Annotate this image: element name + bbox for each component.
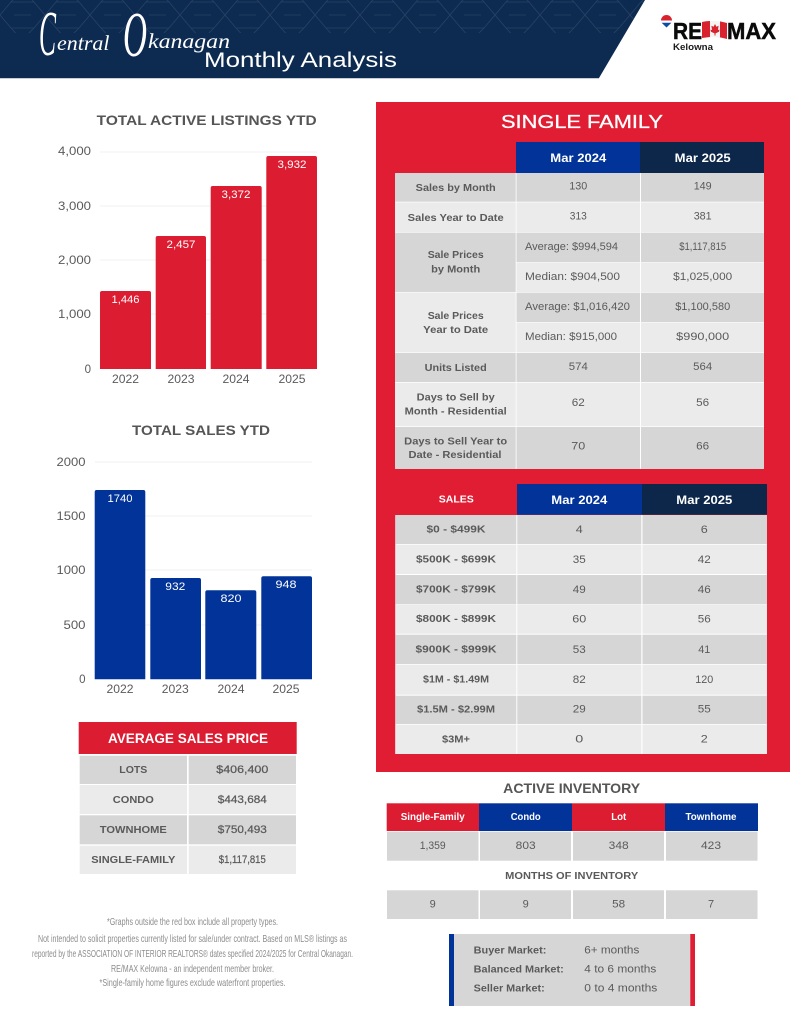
heading: ACTIVE INVENTORY <box>503 781 640 796</box>
row: $800K - $899K: 56 <box>698 614 711 626</box>
row: units listed: Units Listed <box>425 362 487 374</box>
column header 2024: Mar 2024 <box>550 151 607 165</box>
column header 2024 <box>517 484 642 515</box>
row: single-family: SINGLE-FAMILY <box>91 854 175 866</box>
market legend: 4 to 6 months <box>584 963 657 975</box>
row: days to sell by month: Month - Residential <box>405 406 507 418</box>
row: $700K - $799K: 49 <box>573 584 586 596</box>
icon: balloon <box>661 15 672 28</box>
row: $1M - $1.49M <box>395 665 767 695</box>
row: $900K - $999K: 53 <box>573 644 586 656</box>
row: $1.5M - $2.99M: 55 <box>698 704 711 716</box>
row: $3M+ <box>395 725 767 754</box>
footnote text block: *Graphs outside the red box include all property types. <box>107 916 278 928</box>
bar values: 3,932 <box>278 159 306 171</box>
inventory values row: 348 <box>609 840 629 852</box>
y axis labels: 0 <box>85 364 91 376</box>
footnote text block: Not intended to solicit properties currently listed for sale/under contract. Based on MLS® listings as <box>38 933 347 945</box>
inventory header row: Townhome <box>686 812 737 823</box>
y axis labels <box>58 146 91 376</box>
x axis labels: 2022 <box>112 374 139 386</box>
row: townhome <box>80 815 296 844</box>
market legend: Seller Market: <box>474 982 545 994</box>
row: sale prices year to date: $990,000 <box>676 331 729 343</box>
row: lots: LOTS <box>119 764 147 776</box>
row: $900K - $999K: 41 <box>698 644 710 656</box>
x axis labels: 2025 <box>272 684 300 696</box>
market legend: Balanced Market: <box>474 963 564 975</box>
y axis labels: 1000 <box>56 565 86 577</box>
row: units listed: 574 <box>569 361 588 373</box>
months of inventory heading: MONTHS OF INVENTORY <box>505 870 638 882</box>
row: $700K - $799K <box>395 575 767 604</box>
logo: RE/MAX Kelowna <box>661 15 777 53</box>
table: single family stats <box>395 142 764 469</box>
inventory values row: 803 <box>516 840 536 852</box>
row: days to sell year to date: 66 <box>696 440 709 452</box>
row: sale prices year to date <box>395 293 764 352</box>
months of inventory values row <box>387 890 758 919</box>
column header 2024 <box>516 142 640 173</box>
x axis labels: 2025 <box>278 374 306 386</box>
inventory values row: 1,359 <box>420 840 446 852</box>
row: days to sell by month: 62 <box>572 397 585 409</box>
inventory header row: Single-Family <box>401 812 465 823</box>
panel: active inventory <box>387 781 758 1006</box>
row: sale prices year to date: Average: $1,016,420 <box>525 301 630 313</box>
footnote text block: *Single-family home figures exclude waterfront properties. <box>100 977 286 989</box>
inventory values row: 423 <box>701 840 721 852</box>
x axis labels: 2023 <box>162 684 189 696</box>
chart: total sales <box>56 422 312 696</box>
row: $900K - $999K <box>395 635 767 664</box>
row: days to sell year to date: 70 <box>571 440 585 452</box>
bar values: 820 <box>220 593 242 605</box>
icon: Canadian flag <box>702 21 727 39</box>
inventory header row: Condo <box>511 812 541 823</box>
panel header <box>79 722 297 754</box>
logo wordmark right: MAX <box>727 18 777 44</box>
row: sales year to date: 313 <box>570 210 587 222</box>
row: $0 - $499K <box>395 515 767 544</box>
row: $3M+: 0 <box>575 734 583 746</box>
row: lots <box>80 756 296 784</box>
row: $900K - $999K: $900K - $999K <box>416 644 497 656</box>
inventory header row <box>387 803 758 831</box>
market legend <box>449 934 695 1006</box>
y axis labels: 3,000 <box>58 201 91 213</box>
chart title: TOTAL SALES YTD <box>132 422 270 438</box>
bar values <box>108 493 296 605</box>
x axis labels: 2024 <box>222 374 250 386</box>
row: condo: $443,684 <box>218 794 267 806</box>
logo location: Kelowna <box>673 42 714 53</box>
bars <box>100 156 317 369</box>
row: $1.5M - $2.99M: 29 <box>573 704 586 716</box>
row: single-family: $1,117,815 <box>219 854 266 866</box>
row: sale prices by month: by Month <box>431 264 480 276</box>
row: $0 - $499K: $0 - $499K <box>426 524 486 536</box>
row: townhome: $750,493 <box>218 824 267 836</box>
row: sale prices year to date: $1,100,580 <box>675 301 730 313</box>
panel: average sales price <box>79 722 297 874</box>
row: $3M+: $3M+ <box>442 733 470 745</box>
row: units listed <box>395 353 764 382</box>
row: $800K - $899K: 60 <box>572 614 586 626</box>
bar values: 2,457 <box>166 239 196 251</box>
row: days to sell year to date <box>395 427 764 469</box>
x axis labels: 2022 <box>106 684 134 696</box>
x axis labels <box>112 374 306 386</box>
y axis labels: 0 <box>79 674 86 686</box>
row: $500K - $699K: 42 <box>698 554 711 566</box>
bar values: 1740 <box>108 493 132 505</box>
y axis labels: 4,000 <box>58 146 91 158</box>
row: sales by month: 149 <box>694 180 712 192</box>
inventory values row <box>387 832 758 861</box>
row: sale prices year to date: Year to Date <box>423 324 488 336</box>
row: $0 - $499K: 6 <box>701 524 708 536</box>
row: sale prices by month: Median: $904,500 <box>525 271 620 283</box>
logo wordmark left: RE <box>673 18 702 44</box>
y axis labels: 1500 <box>56 511 86 523</box>
months of inventory values row: 9 <box>430 898 436 910</box>
row: days to sell by month: 56 <box>696 397 709 409</box>
row: days to sell by month <box>395 383 764 426</box>
column header 2025: Mar 2025 <box>675 151 731 165</box>
column header sales: SALES <box>439 493 474 505</box>
row: days to sell by month: Days to Sell by <box>417 392 495 404</box>
script title: O <box>123 0 147 70</box>
market legend: 0 to 4 months <box>584 982 658 994</box>
row: condo: CONDO <box>113 794 154 806</box>
row: $500K - $699K: $500K - $699K <box>416 554 496 566</box>
row: days to sell year to date: Date - Residential <box>408 449 502 461</box>
x axis labels <box>106 684 300 696</box>
months of inventory values row: 7 <box>708 898 714 910</box>
row: $1M - $1.49M: $1M - $1.49M <box>423 674 489 686</box>
row: $700K - $799K: $700K - $799K <box>416 584 496 596</box>
x axis labels: 2023 <box>168 374 194 386</box>
bar values: 932 <box>165 581 185 593</box>
y axis labels: 500 <box>64 620 86 632</box>
row: $800K - $899K: $800K - $899K <box>416 613 496 625</box>
inventory header row: Lot <box>611 812 627 823</box>
months of inventory values row: 9 <box>523 898 529 910</box>
row: sale prices by month: $1,117,815 <box>679 241 726 253</box>
y axis labels <box>56 457 86 686</box>
x axis labels: 2024 <box>218 684 245 696</box>
row: sale prices by month: Sale Prices <box>428 249 484 261</box>
header banner <box>0 0 645 79</box>
row: sales by month <box>395 173 764 202</box>
bar values: 948 <box>276 579 296 591</box>
row: sales by month: 130 <box>569 180 587 192</box>
footnote text block: reported by the ASSOCIATION OF INTERIOR REALTORS® dates specified 2024/2025 for Central Okanagan. <box>32 948 353 960</box>
row: $1M - $1.49M: 82 <box>573 674 586 686</box>
row: $500K - $699K: 35 <box>573 554 586 566</box>
row: sales year to date: Sales Year to Date <box>408 212 504 224</box>
market legend: Buyer Market: <box>474 944 546 956</box>
row: lots: $406,400 <box>216 764 268 776</box>
row: $1.5M - $2.99M <box>395 696 767 724</box>
row: sale prices year to date: Median: $915,000 <box>525 331 617 343</box>
row: sales by month: Sales by Month <box>416 182 496 194</box>
script title: entral <box>57 31 115 55</box>
y axis labels: 2,000 <box>58 255 91 267</box>
footnote text block <box>32 916 353 989</box>
bar values <box>112 159 306 306</box>
row: $800K - $899K <box>395 604 767 634</box>
bar values: 3,372 <box>222 189 250 201</box>
script title: kanagan <box>148 29 230 53</box>
main title: Monthly Analysis <box>204 49 397 72</box>
row: $3M+: 2 <box>701 734 708 746</box>
row: sale prices by month: $1,025,000 <box>673 271 732 283</box>
row: $500K - $699K <box>395 545 767 574</box>
panel: single family <box>376 102 790 772</box>
row: days to sell year to date: Days to Sell Year to <box>404 435 507 447</box>
months of inventory values row: 58 <box>612 898 625 910</box>
bar values: 1,446 <box>112 294 140 306</box>
row: sale prices year to date: Sale Prices <box>428 310 484 322</box>
row: sales year to date <box>395 202 764 232</box>
column header 2024: Mar 2024 <box>551 493 608 507</box>
row: $700K - $799K: 46 <box>698 584 711 596</box>
row: single-family <box>80 846 296 874</box>
footnote text block: RE/MAX Kelowna - an independent member broker. <box>111 963 274 975</box>
row: sale prices by month <box>395 233 764 292</box>
market legend: 6+ months <box>584 944 640 956</box>
column header 2025 <box>640 142 764 173</box>
row: units listed: 564 <box>693 361 712 373</box>
panel header: AVERAGE SALES PRICE <box>108 730 268 746</box>
panel heading: SINGLE FAMILY <box>501 111 663 132</box>
column header 2025: Mar 2025 <box>676 493 733 507</box>
script title: C <box>39 0 57 69</box>
chart: total active listings <box>58 112 317 386</box>
chart title: TOTAL ACTIVE LISTINGS YTD <box>97 112 317 128</box>
row: townhome: TOWNHOME <box>100 824 167 836</box>
row: $0 - $499K: 4 <box>576 524 583 536</box>
table: sales by price range <box>395 484 767 754</box>
y axis labels: 2000 <box>56 457 86 469</box>
row: $1M - $1.49M: 120 <box>695 674 713 686</box>
row: $1.5M - $2.99M: $1.5M - $2.99M <box>417 703 495 715</box>
row: sale prices by month: Average: $994,594 <box>525 241 618 253</box>
y axis labels: 1,000 <box>58 309 91 321</box>
bars <box>95 490 312 679</box>
row: condo <box>80 785 296 814</box>
column header 2025 <box>642 484 767 515</box>
row: sales year to date: 381 <box>694 210 712 222</box>
